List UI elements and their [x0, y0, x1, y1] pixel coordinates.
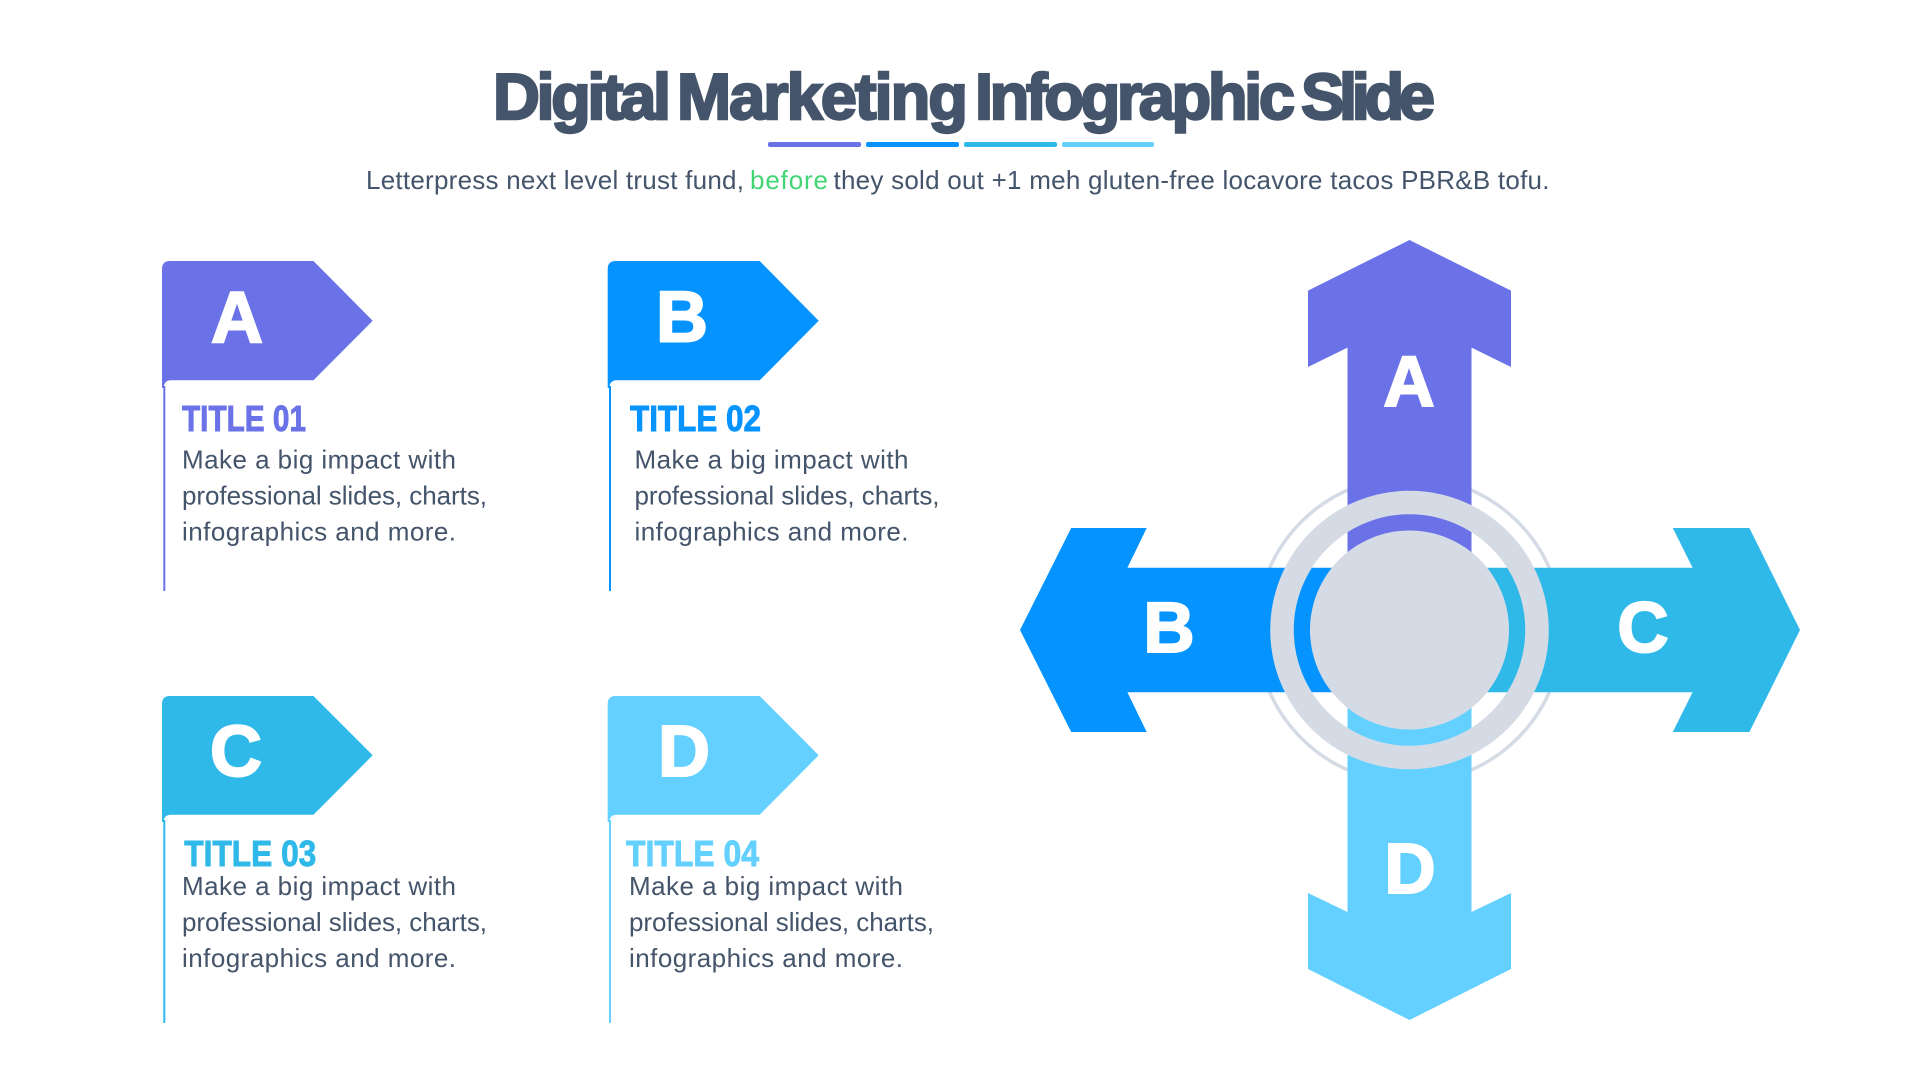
- arrow: C right: [1410, 528, 1800, 732]
- side line: D: [609, 820, 611, 1023]
- thin outer circle: [1256, 477, 1562, 783]
- arrow: D down: [1308, 630, 1511, 1020]
- arrow: A up: [1308, 240, 1511, 630]
- text: description C: Make a big impact with: [182, 871, 456, 901]
- flag: C: [162, 696, 373, 822]
- outer ring: [1282, 502, 1537, 758]
- panel: A: [162, 261, 487, 591]
- flag letter: D: D: [658, 712, 710, 792]
- title: Digital: [493, 60, 671, 133]
- heading: title 01: TITLE 01: [182, 398, 306, 439]
- text: description A: infographics and more.: [182, 516, 456, 546]
- heading: title 03: TITLE 03: [184, 833, 316, 874]
- title: Slide: [1301, 60, 1435, 133]
- title: Marketing: [677, 60, 968, 133]
- text: description D: professional slides, charts,: [629, 907, 934, 937]
- text: description D: Make a big impact with: [629, 871, 903, 901]
- flag: D: [608, 696, 819, 822]
- flag letter: A: A: [211, 278, 263, 358]
- center disc: [1310, 530, 1509, 730]
- text: description C: infographics and more.: [182, 943, 456, 973]
- text: description B: infographics and more.: [634, 516, 908, 546]
- title: Infographic: [975, 60, 1295, 133]
- flag: B: [608, 261, 819, 388]
- side line: C: [163, 820, 165, 1023]
- cross arrow diagram: [1020, 240, 1800, 1020]
- arrow letter: B: B: [1143, 589, 1195, 668]
- arrow letter: A: A: [1383, 343, 1435, 422]
- arrow letter: D: D: [1384, 830, 1436, 909]
- panel: B: [608, 261, 940, 591]
- panel: C: [162, 696, 487, 1023]
- arrow: B left: [1020, 528, 1410, 732]
- heading: title 02: TITLE 02: [630, 398, 761, 439]
- side line: B: [609, 386, 611, 591]
- subtitle: before: [750, 165, 828, 195]
- side line: A: [163, 386, 165, 591]
- text: description B: Make a big impact with: [634, 444, 908, 474]
- text: description A: professional slides, charts,: [182, 480, 487, 510]
- panel: D: [608, 696, 934, 1023]
- heading: title 04: TITLE 04: [626, 833, 759, 874]
- text: description A: Make a big impact with: [182, 444, 456, 474]
- flag: A: [162, 261, 373, 388]
- flag letter: B: B: [656, 278, 708, 358]
- text: description C: professional slides, charts,: [182, 907, 487, 937]
- title underline bars: [768, 142, 1154, 147]
- text: description D: infographics and more.: [629, 943, 903, 973]
- subtitle: Letterpress next level trust fund,: [366, 165, 744, 195]
- subtitle: they sold out +1 meh gluten-free locavore tacos PBR&B tofu.: [834, 165, 1550, 195]
- text: description B: professional slides, charts,: [634, 480, 940, 510]
- flag letter: C: C: [210, 712, 262, 792]
- arrow letter: C: C: [1617, 589, 1669, 668]
